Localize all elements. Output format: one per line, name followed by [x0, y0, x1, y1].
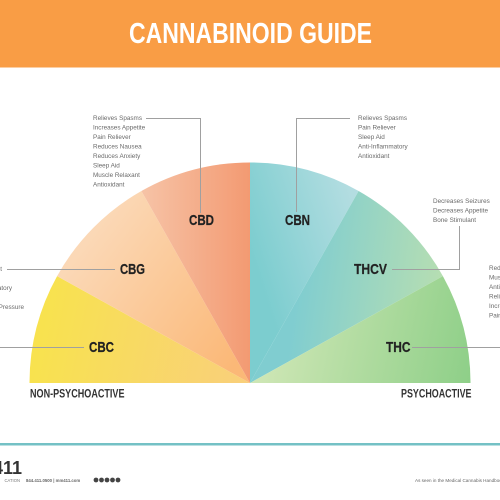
- label: CBC: CBC: [89, 339, 114, 356]
- label: CBG: CBG: [120, 261, 145, 278]
- list: CBN effects: Antioxidant: [358, 153, 390, 160]
- axis label: psychoactive: PSYCHOACTIVE: [401, 388, 472, 400]
- list: CBD effects: Muscle Relaxant: [93, 172, 140, 179]
- list: CBD effects: Relieves Spasms: [93, 115, 142, 122]
- list: CBD effects: [93, 115, 146, 188]
- list: CBD effects: Reduces Anxiety: [93, 153, 141, 160]
- list: CBD effects: Reduces Nausea: [93, 144, 142, 150]
- footer contact: 844.411.0500 | mm411.com: [26, 478, 80, 483]
- footer rule: [0, 443, 500, 446]
- wedge: THC: [250, 276, 471, 383]
- connector lines: [0, 118, 500, 348]
- list: CBN effects: Sleep Aid: [358, 134, 385, 141]
- wedge: CBG: [57, 191, 250, 383]
- wedge: CBC: [29, 276, 250, 383]
- list: CBN effects: Pain Reliever: [358, 124, 396, 132]
- list: CBD effects: Antioxidant: [93, 182, 125, 188]
- social icons: [94, 478, 120, 482]
- list: THC effects: [489, 265, 500, 320]
- semicircle chart: [29, 162, 471, 383]
- wedge: CBN: [250, 162, 359, 383]
- list: CBN effects: Anti-Inflammatory: [358, 144, 409, 150]
- label: CBD: CBD: [189, 212, 214, 229]
- footer logo: CATION: [4, 478, 20, 483]
- list: THCV effects: Bone Stimulant: [433, 217, 476, 224]
- axis label: non-psychoactive: NON-PSYCHOACTIVE: [30, 388, 125, 400]
- label: THC: THC: [386, 339, 411, 356]
- wedge: CBD: [141, 162, 250, 383]
- list: CBG effects: [0, 266, 24, 311]
- label: CBN: CBN: [285, 212, 310, 229]
- header banner: [0, 0, 500, 68]
- list: CBD effects: Sleep Aid: [93, 162, 120, 170]
- list: THCV effects: [433, 198, 490, 224]
- list: CBN effects: Relieves Spasms: [358, 115, 407, 122]
- list: THCV effects: Decreases Appetite: [433, 208, 488, 214]
- list: CBN effects: [358, 115, 409, 160]
- title: CANNABINOID GUIDE: [129, 18, 372, 50]
- list: CBD effects: Pain Reliever: [93, 134, 131, 141]
- list: THCV effects: Decreases Seizures: [433, 198, 490, 205]
- list: CBD effects: Increases Appetite: [93, 124, 146, 132]
- label: THCV: THCV: [354, 261, 387, 278]
- wedge: THCV: [250, 191, 443, 383]
